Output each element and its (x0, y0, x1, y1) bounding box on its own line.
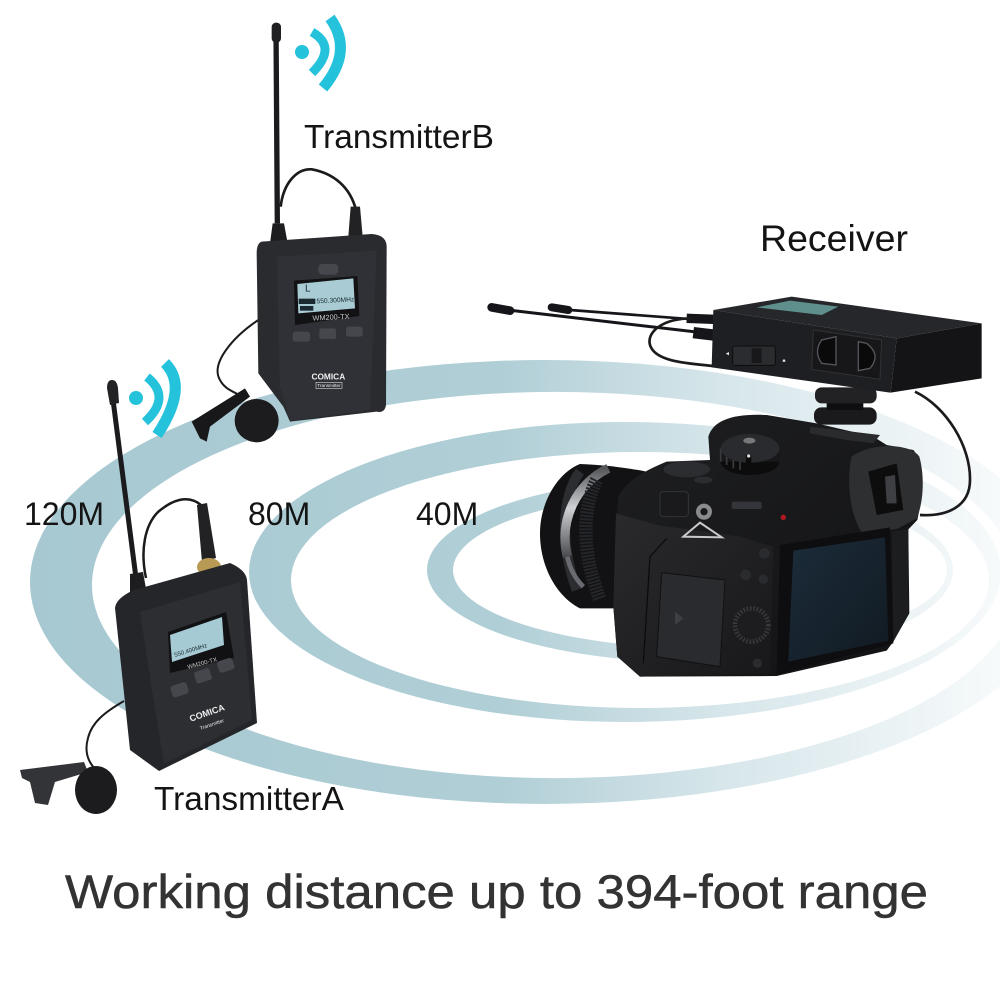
connector A (197, 503, 216, 562)
battery panel (812, 330, 882, 379)
logo B (311, 371, 345, 388)
clip B (192, 388, 250, 442)
label: 80M: 80M (248, 496, 310, 532)
label: Receiver: Receiver (760, 217, 908, 259)
camera body (613, 415, 922, 677)
logo B: COMICA (311, 371, 345, 381)
buttons A (167, 657, 238, 698)
front window (660, 492, 688, 517)
front panel A (140, 582, 252, 764)
label: 40M: 40M (416, 496, 478, 532)
icon: wifi signal A (129, 363, 175, 435)
antenna B (269, 23, 288, 248)
eyecup (849, 446, 923, 535)
logo B: Transmitter (317, 383, 341, 388)
grip seam (643, 538, 667, 663)
strap lug (683, 523, 722, 537)
logo A (188, 702, 230, 734)
ring: 120M (30, 360, 1000, 804)
foam mic A (75, 766, 117, 814)
labels (24, 119, 908, 818)
side controls (740, 548, 770, 668)
camera grip (613, 513, 773, 677)
front panel B (277, 251, 377, 421)
logo A: COMICA (188, 702, 226, 724)
indicator light (781, 515, 786, 520)
top buttons (663, 461, 713, 483)
receiver (712, 297, 982, 393)
screen hinge (892, 529, 908, 642)
battery door (657, 573, 725, 667)
rear dial (735, 608, 768, 642)
antennas (492, 307, 713, 335)
screen B (294, 276, 359, 325)
connector B (348, 207, 363, 237)
buttons B (293, 327, 363, 342)
screen B: WM200-TX (312, 312, 350, 323)
screen B: 550.300MHz (316, 296, 354, 305)
antenna A (107, 380, 148, 606)
clip A (20, 762, 88, 805)
mic cable loop B (281, 169, 356, 210)
range rings (30, 360, 1000, 804)
button mute B (318, 264, 338, 275)
camera cable (915, 392, 970, 515)
camera with receiver (492, 297, 982, 677)
receiver display (757, 301, 838, 315)
label: TransmitterB: TransmitterB (304, 119, 494, 156)
ring: 40M (427, 478, 953, 662)
screen A (168, 612, 234, 673)
body B (257, 234, 387, 422)
screen A: WM200-TX (187, 657, 218, 671)
lavalier cable A (86, 701, 124, 770)
ring: 80M (249, 422, 1000, 722)
icon: wifi signal B (295, 18, 340, 88)
hot shoe (810, 387, 880, 443)
transmitter B (192, 23, 387, 442)
lens (540, 464, 647, 608)
receiver cable loop (650, 318, 713, 366)
gold nut A (197, 558, 221, 576)
label: 120M: 120M (24, 496, 104, 532)
logo A: Transmitter (199, 718, 225, 732)
slide switch (733, 346, 775, 365)
control wheel (732, 502, 762, 509)
label: TransmitterA: TransmitterA (154, 781, 345, 818)
title: Working distance up to 394-foot range (65, 865, 928, 918)
play mark (675, 612, 683, 625)
top dial (721, 434, 779, 475)
body A (115, 563, 257, 771)
mic cable loop A (143, 499, 201, 578)
rear screen (777, 527, 893, 675)
lavalier cable B (218, 320, 258, 397)
battery latches (817, 337, 836, 365)
transmitter A (20, 380, 257, 814)
foam mic B (235, 399, 279, 442)
screen B: L (305, 284, 311, 295)
screen A: 550.400MHz (174, 643, 208, 659)
